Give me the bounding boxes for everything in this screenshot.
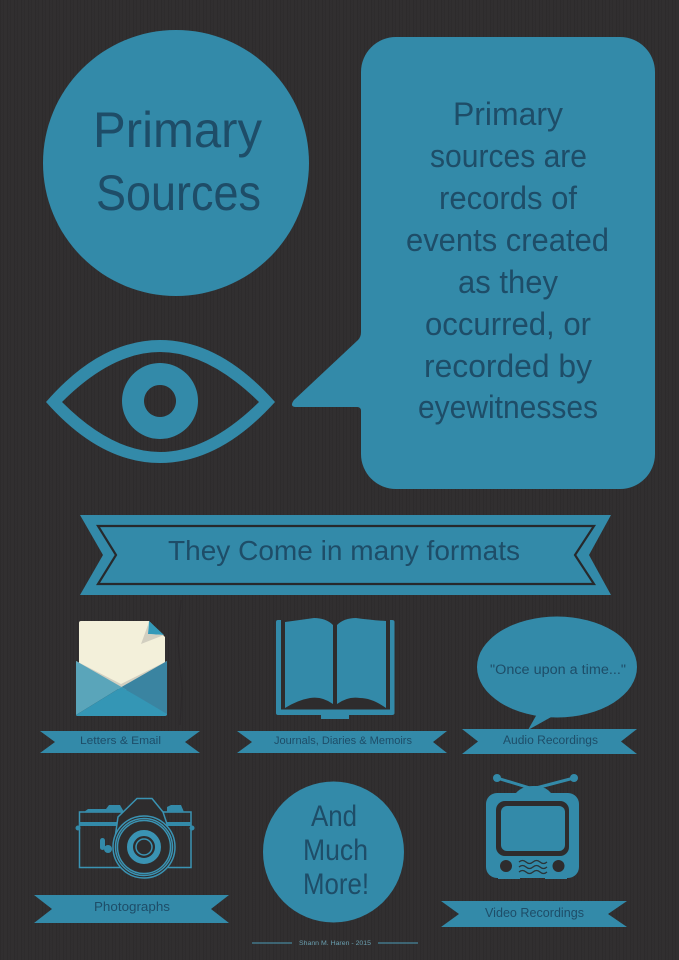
definition text: events created (406, 222, 609, 258)
definition text: as they (458, 264, 558, 300)
icon: television (486, 774, 579, 879)
icon: letter and envelope (76, 621, 167, 716)
definition text: sources are (430, 138, 587, 174)
ribbon: video recordings (441, 901, 627, 927)
definition text: eyewitnesses (418, 389, 598, 425)
definition text: Primary (453, 96, 563, 132)
and much more circle: Much (303, 834, 368, 867)
ribbon: letters and email (40, 731, 200, 753)
ribbon: journals, diaries and memoirs: Journals, Diaries & Memoirs (274, 735, 412, 747)
ribbon: audio recordings (462, 729, 637, 754)
and much more circle: More! (303, 868, 369, 901)
ribbon: photographs (34, 895, 229, 923)
definition text: occurred, or (425, 306, 591, 342)
ribbon: audio recordings: Audio Recordings (503, 735, 598, 747)
ribbon: journals, diaries and memoirs (237, 731, 447, 753)
ribbon: photographs: Photographs (94, 899, 171, 914)
definition text (406, 96, 609, 425)
title text: Sources (96, 165, 261, 221)
title text (93, 102, 262, 221)
title circle (43, 30, 309, 296)
icon: camera (76, 798, 194, 878)
heading banner (80, 515, 611, 595)
icon: speech balloon (477, 616, 637, 730)
heading text: They Come in many formats (168, 535, 520, 566)
definition text: records of (439, 180, 577, 216)
definition text: recorded by (424, 348, 592, 384)
icon: speech balloon: "Once upon a time..." (490, 662, 626, 677)
ribbon: video recordings: Video Recordings (485, 905, 584, 920)
icon: open book (276, 618, 394, 719)
panel: definition speech bubble (292, 37, 655, 489)
footer credit: Shann M. Haren - 2015 (299, 940, 371, 947)
ribbon: letters and email: Letters & Email (80, 735, 161, 747)
title text: Primary (93, 102, 262, 158)
and much more circle (263, 782, 404, 922)
icon: eye (46, 340, 275, 463)
and much more circle: And (311, 800, 357, 833)
